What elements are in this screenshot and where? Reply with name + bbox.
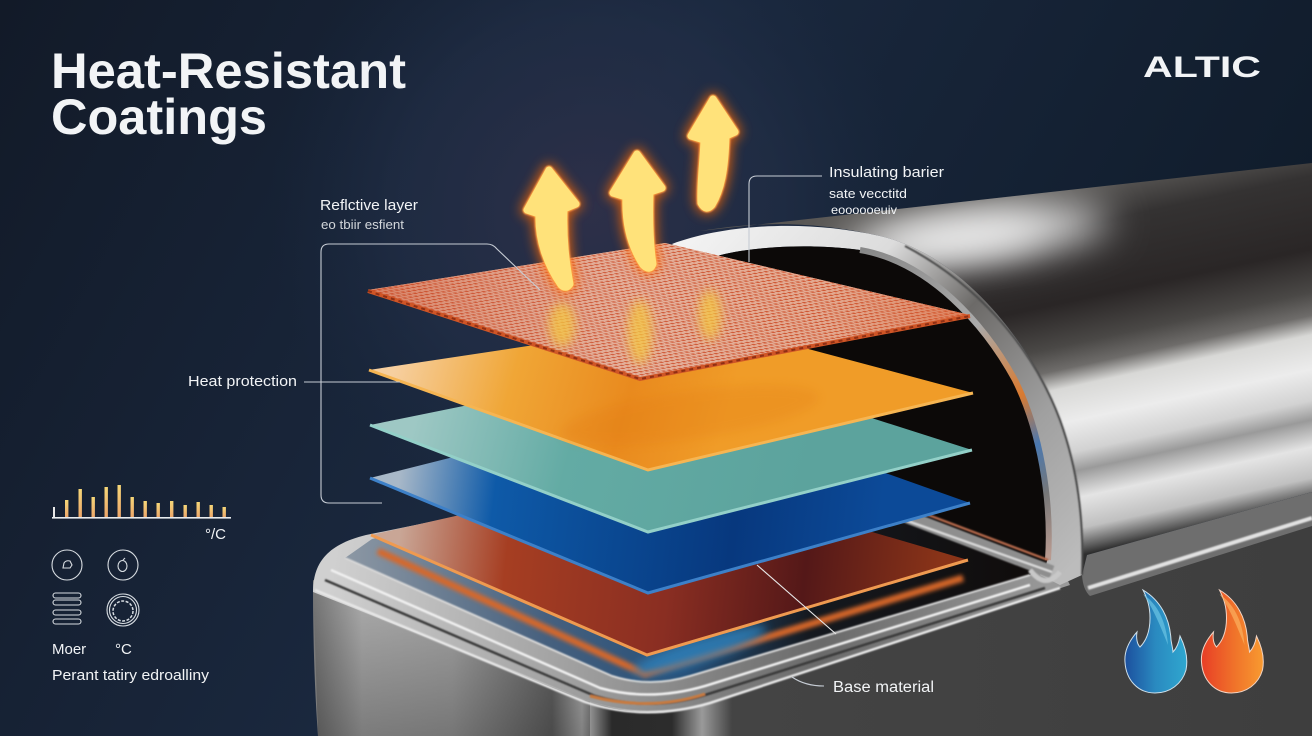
arrow fills — [527, 99, 735, 287]
inner rail — [905, 510, 1060, 581]
bars — [53, 485, 226, 518]
tray interior — [345, 515, 1040, 682]
label: insulating barrier: sate vecctitd — [829, 187, 907, 201]
heat arrows — [527, 99, 735, 287]
icon: circle right — [108, 550, 138, 580]
arrow glow — [527, 99, 735, 287]
blue reflection — [630, 617, 770, 683]
layer: blue — [370, 400, 970, 593]
heat protection line — [304, 381, 400, 383]
pipe interior — [700, 246, 1049, 570]
label: insulating barrier — [829, 164, 944, 217]
housing shading — [313, 580, 590, 736]
label: heat protection: Heat protection — [188, 373, 297, 390]
label: base material: Base material — [833, 679, 934, 696]
icon: circle left — [52, 550, 82, 580]
label: insulating barrier: Insulating barier — [829, 164, 944, 181]
metal pipe — [672, 163, 1312, 596]
axis — [52, 517, 231, 519]
rim highlights — [315, 558, 1060, 712]
coating layers — [368, 243, 973, 655]
label: insulating barrier: eoooooeuiv — [831, 203, 897, 217]
pipe barrel — [700, 163, 1312, 575]
logo: ALTIC — [1143, 51, 1261, 84]
arrow edge — [527, 99, 735, 287]
base material lines — [757, 565, 836, 634]
icon: stacked layers — [53, 593, 81, 624]
housing rim — [313, 500, 1070, 712]
arch rim — [672, 226, 1082, 585]
layer: teal — [370, 360, 972, 532]
housing body — [313, 500, 1312, 736]
parameter labels: Perant tatiry edroalliny — [52, 667, 210, 684]
lip highlight — [1088, 518, 1312, 588]
title: Heat-Resistant — [51, 43, 406, 99]
title: Coatings — [51, 89, 267, 145]
inner arch reflection — [860, 250, 1049, 560]
pipe top highlight — [838, 198, 1112, 274]
arrow reflections on plate — [549, 290, 721, 364]
axis unit: °/C — [205, 526, 226, 543]
shadow of reflective layer — [558, 373, 822, 457]
layer: orange — [369, 320, 973, 470]
parameter labels: °C — [115, 641, 132, 658]
layer: base coat — [371, 470, 968, 655]
insulating barrier line — [749, 176, 822, 262]
lower metal housing — [313, 500, 1312, 736]
parameter icons — [52, 550, 139, 626]
layer: reflective copper — [368, 243, 970, 379]
parameter labels — [52, 641, 210, 684]
title — [51, 43, 406, 145]
reflective layer bracket — [321, 244, 540, 503]
parameter labels: Moer — [52, 641, 86, 658]
icon: blue flame — [1125, 590, 1187, 693]
label: reflective layer: eo tbiir esfient — [321, 218, 405, 232]
icon: ring gauge — [107, 594, 139, 626]
leader lines — [304, 176, 836, 686]
temperature bar chart — [52, 485, 231, 543]
label: reflective layer: Reflctive layer — [320, 197, 418, 214]
arch outer edge — [905, 246, 1082, 575]
orange reflection — [378, 551, 963, 674]
pipe lower lip — [1082, 492, 1312, 596]
icon: orange flame — [1201, 590, 1263, 693]
label: reflective layer — [320, 197, 418, 232]
base material short leader — [792, 677, 824, 686]
